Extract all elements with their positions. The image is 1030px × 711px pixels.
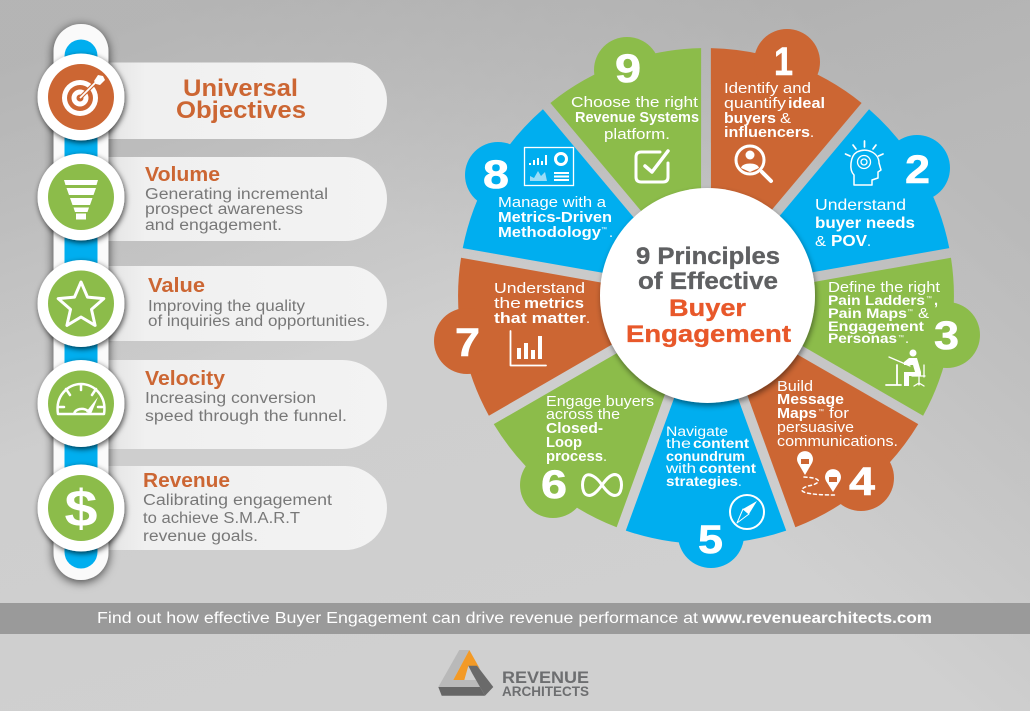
- segment 3: Define the right: [828, 280, 940, 296]
- text: volume: Volume: [145, 163, 220, 186]
- center title: 9 Principles: [636, 243, 780, 270]
- segment 5: 5: [698, 518, 723, 562]
- blue bar: [64, 40, 98, 568]
- segment 2: .: [867, 234, 871, 250]
- segment 9: [546, 36, 776, 310]
- logo wordmark: REVENUE: [502, 668, 589, 687]
- segment 7: the: [494, 296, 521, 312]
- center title: Engagement: [626, 321, 791, 348]
- icon: target: [38, 54, 124, 140]
- segment 5: conundrum: [666, 449, 745, 464]
- text: revenue: to achieve S.M.A.R.T: [143, 510, 301, 527]
- text: volume: and engagement.: [145, 217, 282, 234]
- segment 6: Engage buyers: [546, 394, 654, 410]
- footer band: [0, 603, 1030, 634]
- segment 4: ™: [818, 408, 824, 415]
- segment 4: for: [829, 406, 849, 422]
- objective pills: [100, 62, 387, 550]
- text: value: Improving the quality: [148, 298, 305, 315]
- segment 1: influencers: [724, 125, 810, 141]
- segment 7: metrics: [524, 296, 584, 312]
- icon: head with target: [846, 141, 883, 185]
- text: revenue: [143, 469, 333, 545]
- segment 7: [434, 220, 706, 418]
- heading: universal objectives: Objectives: [176, 97, 306, 124]
- text: volume: prospect awareness: [145, 201, 303, 218]
- segment 3: ™: [926, 295, 932, 302]
- center circle: [600, 188, 815, 403]
- segment 3: 3: [934, 314, 959, 358]
- segment 2: 2: [905, 148, 930, 192]
- segment 4: Message: [777, 392, 844, 408]
- segment 5: the: [666, 436, 691, 451]
- segment 3: ™: [898, 334, 904, 341]
- center title: of Effective: [638, 268, 778, 295]
- segment 1: quantify: [724, 96, 787, 112]
- segment 4: communications.: [777, 434, 898, 450]
- segment 6: 6: [541, 463, 567, 507]
- segment 4: Build: [777, 379, 813, 395]
- logo wordmark: [502, 668, 589, 699]
- segment 4: [654, 256, 927, 537]
- heading: universal objectives: Universal: [183, 75, 298, 102]
- segment 6: Closed-: [546, 421, 603, 437]
- center title: [626, 243, 791, 348]
- icon: dashboard: [524, 148, 574, 186]
- segment 6: Loop: [546, 435, 582, 451]
- text: value: Value: [148, 274, 205, 297]
- icon: checkbox: [636, 151, 668, 182]
- panel: principles wheel: [434, 29, 980, 568]
- segment 8: Methodology: [498, 225, 601, 241]
- text: velocity: [145, 367, 347, 425]
- segment 2: POV: [831, 233, 867, 250]
- segment 8: 8: [483, 153, 509, 197]
- segment 3: Personas: [828, 331, 897, 346]
- segment 1: .: [810, 125, 814, 141]
- segment 1: [636, 29, 866, 310]
- center title: Buyer: [669, 295, 747, 322]
- segment 3: Pain Maps: [828, 306, 907, 321]
- segment 6: across the: [546, 407, 620, 423]
- icon: dollar: [38, 464, 124, 552]
- segment 5: Navigate: [666, 424, 728, 439]
- segment 5: content: [693, 436, 750, 451]
- segment 8: [451, 103, 733, 358]
- segment 4: persuasive: [777, 420, 854, 436]
- segment 2: &: [815, 234, 826, 250]
- segment 6: process: [546, 449, 603, 465]
- segment 4: Maps: [777, 406, 817, 422]
- icon: dollar: $: [64, 480, 98, 538]
- icon: magnifier: [736, 146, 771, 181]
- segment 2: [679, 103, 961, 358]
- footer band: www.revenuearchitects.com: [701, 610, 932, 627]
- segment 6: .: [603, 449, 607, 465]
- icon: bar chart: [510, 331, 546, 366]
- segment 7: Understand: [494, 281, 585, 297]
- text: value: of inquiries and opportunities.: [148, 313, 370, 330]
- icon: star: [38, 260, 124, 347]
- text: velocity: Increasing conversion: [145, 390, 316, 407]
- segment 8: ™: [601, 226, 607, 233]
- heading: universal objectives: [176, 75, 306, 124]
- white rail: [54, 24, 108, 580]
- segment 3: [706, 220, 980, 418]
- segment 7: 7: [455, 321, 480, 365]
- segment 3: ™: [907, 308, 913, 315]
- text: volume: Generating incremental: [145, 186, 328, 203]
- segment 1: Identify and: [724, 81, 811, 97]
- segment 2: Understand: [815, 197, 906, 214]
- segment 4: 4: [849, 460, 876, 504]
- segment 7: .: [586, 311, 590, 327]
- text: volume: [145, 163, 328, 234]
- icon: funnel: [38, 154, 124, 240]
- text: revenue: Revenue: [143, 469, 230, 492]
- icon: map pins: [797, 451, 841, 495]
- text: velocity: speed through the funnel.: [145, 408, 347, 425]
- icon: speedometer: [38, 360, 124, 447]
- logo mark: [438, 650, 493, 696]
- segment 3: Engagement: [828, 319, 925, 334]
- segment 3: &: [918, 306, 929, 322]
- segment 2: buyer needs: [815, 215, 915, 232]
- segment 5: strategies: [666, 474, 738, 489]
- segment 8: Metrics-Driven: [498, 210, 612, 226]
- segment 1: 1: [774, 40, 793, 84]
- segment 9: platform.: [604, 127, 670, 143]
- icon: compass: [730, 495, 764, 529]
- text: value: [148, 274, 370, 330]
- segment 3: Pain Ladders: [828, 293, 925, 308]
- footer band: Find out how effective Buyer Engagement can drive revenue performance at: [97, 610, 699, 627]
- segment 9: Revenue Systems: [575, 110, 699, 126]
- logo wordmark: ARCHITECTS: [502, 684, 589, 699]
- segment 8: .: [609, 225, 613, 241]
- text: revenue: Calibrating engagement: [143, 492, 333, 509]
- icon: infinity: [582, 475, 622, 495]
- segment 1: ideal: [788, 96, 825, 112]
- icon: person at desk: [886, 350, 925, 386]
- segment 9: 9: [615, 47, 641, 91]
- segment 6: [485, 256, 758, 537]
- segment 5: [626, 311, 786, 568]
- segment 3: .: [905, 331, 909, 347]
- segment 5: .: [738, 474, 742, 489]
- segment 3: ,: [934, 293, 938, 309]
- text: velocity: Velocity: [145, 367, 226, 390]
- segment 1: buyers: [724, 111, 776, 127]
- segment 7: that matter: [494, 311, 586, 327]
- segment 5: with: [665, 461, 696, 476]
- panel: universal objectives timeline: [38, 24, 387, 580]
- logo: revenue architects: [438, 650, 589, 699]
- segment 1: &: [780, 111, 791, 127]
- segment 5: content: [699, 461, 757, 476]
- segment 9: Choose the right: [571, 95, 698, 111]
- text: revenue: revenue goals.: [143, 528, 258, 545]
- segment 8: Manage with a: [498, 195, 607, 211]
